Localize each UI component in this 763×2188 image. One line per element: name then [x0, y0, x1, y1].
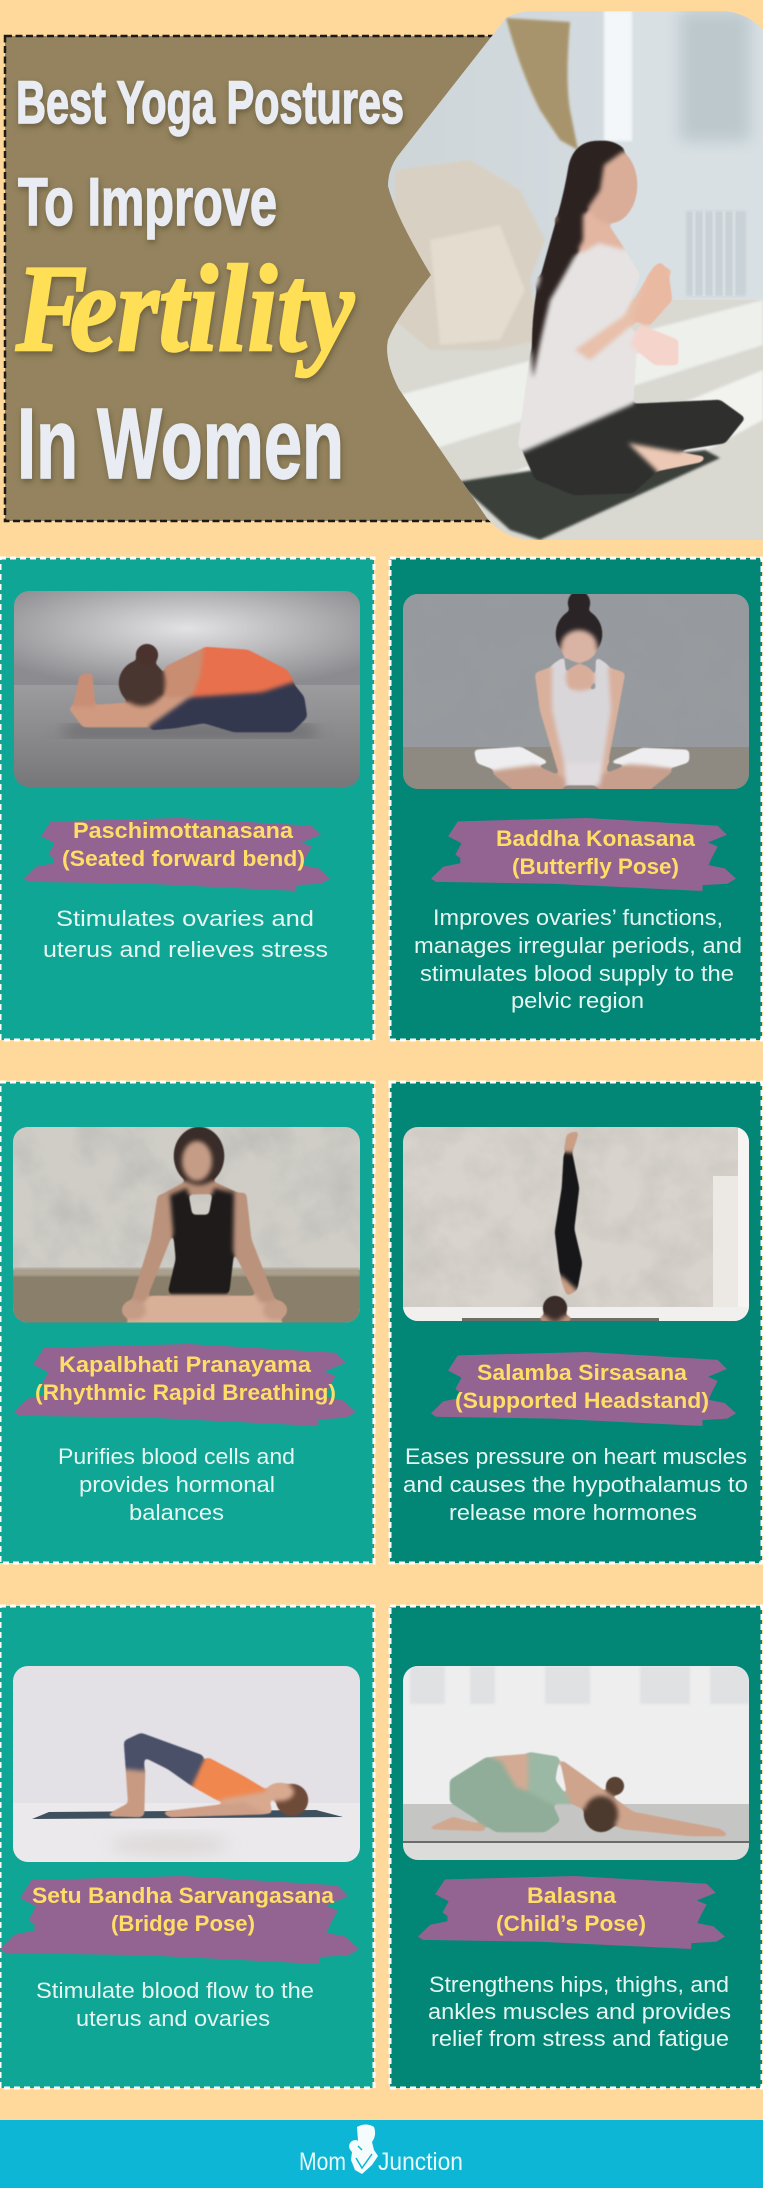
panel: Baddha Konasana — [390, 558, 762, 1040]
panel: Setu Bandha Sarvangasana — [0, 1606, 374, 2088]
panel background — [0, 1606, 374, 2088]
icon cut line — [356, 2146, 372, 2168]
label: pose name — [14, 1344, 356, 1426]
description line 4: pelvic region — [511, 988, 644, 1013]
logo text: Junction: Junction — [378, 2148, 463, 2176]
title text — [15, 69, 404, 500]
panel background — [390, 1606, 762, 2088]
pose name line 2: (Seated forward bend) — [62, 846, 305, 871]
label: pose name — [431, 1352, 736, 1426]
title line 2: To Improve — [18, 164, 277, 240]
description line 3: relief from stress and fatigue — [431, 2026, 729, 2051]
description line 2: and causes the hypothalamus to — [403, 1472, 748, 1497]
description — [403, 1444, 748, 1525]
photo: child's pose — [403, 1666, 749, 1860]
panel: Salamba Sirsasana — [390, 1082, 762, 1563]
description line 1: Stimulates ovaries and — [56, 906, 314, 931]
photo: seated breathing — [13, 1127, 360, 1327]
title line 1: Best Yoga Postures — [16, 69, 404, 136]
logo — [299, 2124, 463, 2176]
pose name line 2: (Butterfly Pose) — [512, 854, 679, 879]
panel: Balasna — [390, 1606, 762, 2088]
description line 1: Stimulate blood flow to the — [36, 1978, 314, 2003]
title highlight word: Fertility — [15, 240, 355, 377]
pose name line 1: Salamba Sirsasana — [477, 1360, 688, 1385]
panel background — [390, 1082, 762, 1563]
description line 1: Purifies blood cells and — [58, 1444, 295, 1469]
photo: supported headstand — [403, 1127, 749, 1322]
icon silhouette — [349, 2124, 378, 2174]
pose name line 2: (Supported Headstand) — [455, 1388, 709, 1413]
panel background — [390, 558, 762, 1040]
photo: bridge pose — [13, 1666, 360, 1863]
description line 3: release more hormones — [449, 1500, 697, 1525]
brush highlight — [0, 1876, 359, 1964]
brush highlight — [431, 818, 736, 891]
description — [414, 905, 742, 1013]
description line 2: uterus and ovaries — [76, 2006, 270, 2031]
description — [36, 1978, 314, 2031]
description line 2: provides hormonal — [79, 1472, 275, 1497]
panel background — [0, 1082, 374, 1563]
label: pose name — [0, 1876, 359, 1964]
footer bar — [0, 2120, 763, 2188]
label: pose name — [418, 1876, 725, 1949]
pose name line 2: (Child’s Pose) — [496, 1911, 646, 1936]
pose name line 2: (Bridge Pose) — [111, 1911, 255, 1936]
description line 1: Improves ovaries’ functions, — [433, 905, 723, 930]
title line 4: In Women — [17, 388, 344, 500]
logo icon: mother and child heart — [349, 2124, 378, 2174]
photo: butterfly pose — [403, 591, 749, 792]
description line 2: ankles muscles and provides — [428, 1999, 731, 2024]
pose name line 1: Paschimottanasana — [73, 818, 294, 843]
description — [428, 1972, 731, 2051]
brush highlight — [14, 1344, 356, 1426]
pose name line 2: (Rhythmic Rapid Breathing) — [35, 1380, 336, 1405]
header panel — [5, 0, 763, 545]
panel: Paschimottanasana — [0, 558, 374, 1040]
title box — [5, 36, 505, 521]
panel background — [0, 558, 374, 1040]
brush highlight — [24, 818, 330, 891]
label: pose name — [431, 818, 736, 891]
description line 3: stimulates blood supply to the — [420, 961, 734, 986]
brush highlight — [431, 1352, 736, 1426]
description line 1: Strengthens hips, thighs, and — [429, 1972, 729, 1997]
description line 2: uterus and relieves stress — [43, 937, 328, 962]
description line 1: Eases pressure on heart muscles — [405, 1444, 747, 1469]
description — [43, 906, 328, 962]
description line 2: manages irregular periods, and — [414, 933, 742, 958]
label: pose name — [24, 818, 330, 891]
footer background — [0, 2120, 763, 2188]
pose name line 1: Baddha Konasana — [496, 826, 696, 851]
pose name line 1: Balasna — [527, 1883, 617, 1908]
description line 3: balances — [129, 1500, 224, 1525]
description — [58, 1444, 295, 1525]
panel: Kapalbhati Pranayama — [0, 1082, 374, 1563]
pose name line 1: Setu Bandha Sarvangasana — [32, 1883, 335, 1908]
brush highlight — [418, 1876, 725, 1949]
pose name line 1: Kapalbhati Pranayama — [59, 1352, 312, 1377]
logo text: Mom: Mom — [299, 2148, 346, 2176]
header photo: woman meditating — [380, 0, 763, 545]
photo: seated forward bend — [14, 591, 360, 787]
